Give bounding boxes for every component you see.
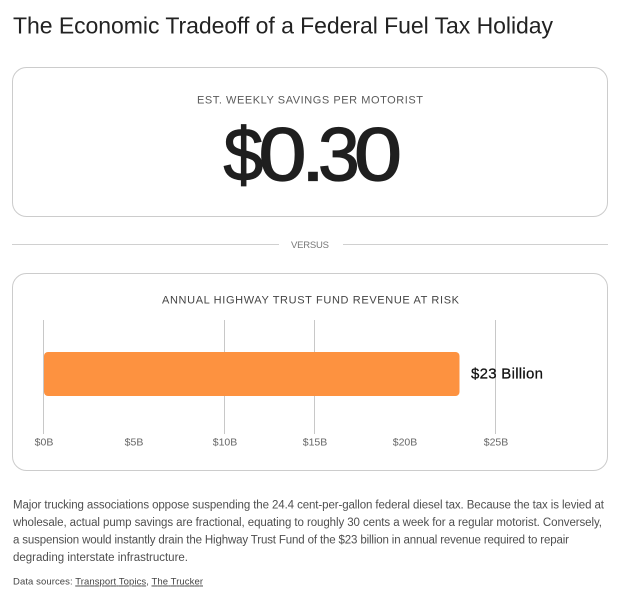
axis labels: $25B bbox=[484, 436, 508, 448]
axis labels: $0B bbox=[35, 436, 53, 448]
savings value: . bbox=[301, 114, 325, 197]
title: The Economic Tradeoff of a Federal Fuel Tax Holiday bbox=[13, 12, 554, 38]
panel: weekly savings bbox=[12, 68, 608, 216]
panel: trust fund revenue bbox=[12, 274, 608, 470]
description text: Major trucking associations oppose suspending the 24.4 cent-per-gallon federal diesel tax. Because the tax is levied at bbox=[13, 500, 605, 512]
bar chart bbox=[35, 320, 543, 448]
data sources: Data sources: Transport Topics, The Trucker bbox=[13, 576, 203, 588]
axis labels: $10B bbox=[213, 436, 237, 448]
axis labels: $20B bbox=[393, 436, 417, 448]
savings value bbox=[224, 112, 402, 197]
axis labels: $5B bbox=[125, 436, 143, 448]
savings label: EST. WEEKLY SAVINGS PER MOTORIST bbox=[197, 94, 423, 106]
savings value: 3 bbox=[318, 112, 360, 196]
bar: 23 billion bbox=[44, 352, 460, 396]
description text: degrading interstate infrastructure. bbox=[13, 552, 188, 564]
description text: wholesale, actual pump savings are fractional, equating to roughly 30 cents a week for a regular motorist. Conversely, bbox=[12, 517, 602, 529]
versus divider: VERSUS bbox=[291, 240, 329, 251]
savings value: $ bbox=[224, 114, 263, 197]
chart heading: ANNUAL HIGHWAY TRUST FUND REVENUE AT RISK bbox=[162, 294, 460, 306]
savings value: 0 bbox=[354, 114, 402, 197]
axis labels bbox=[35, 436, 508, 448]
savings value: 0 bbox=[258, 114, 306, 197]
axis labels: $15B bbox=[303, 436, 327, 448]
bar value: $23 Billion bbox=[471, 366, 543, 382]
description text bbox=[12, 500, 605, 564]
description text: a suspension would instantly drain the Highway Trust Fund of the $23 billion in annual revenue required to repair bbox=[13, 534, 569, 546]
